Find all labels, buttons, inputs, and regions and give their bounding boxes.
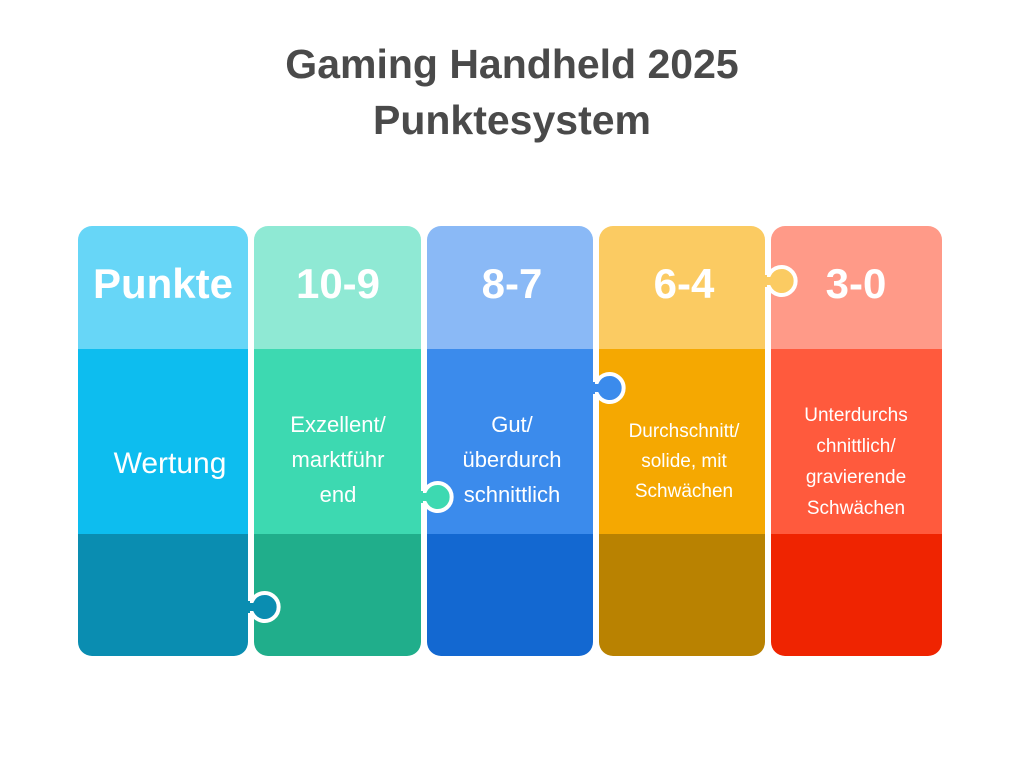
column: 8-7: schnittlich	[464, 482, 560, 507]
title: Gaming Handheld 2025	[285, 41, 739, 87]
column: 3-0: 3-0	[826, 260, 886, 307]
column: 3-0: gravierende	[806, 467, 906, 488]
column: Punkte	[78, 226, 248, 656]
column: 6-4: Schwächen	[635, 481, 733, 502]
column: 3-0: chnittlich/	[816, 436, 896, 457]
column: 6-4: solide, mit	[641, 451, 727, 472]
column: Punkte: Wertung	[114, 447, 226, 480]
column: 3-0: Unterdurchs	[804, 405, 908, 426]
title	[285, 41, 739, 143]
column: 10-9: end	[320, 482, 356, 507]
column: 8-7: Gut/	[491, 412, 534, 437]
puzzle tabs	[244, 267, 796, 621]
column: 6-4: 6-4	[654, 260, 715, 307]
column: 8-7: überdurch	[462, 447, 562, 472]
column: 6-4	[599, 226, 765, 656]
column: Punkte: Punkte	[93, 260, 233, 307]
column: 6-4: Durchschnitt/	[629, 421, 740, 442]
column: 8-7: 8-7	[482, 260, 542, 307]
column: 3-0: Schwächen	[807, 498, 905, 519]
column: 10-9	[254, 226, 421, 656]
column: 10-9: 10-9	[296, 260, 380, 307]
column: 8-7	[427, 226, 593, 656]
column: 3-0	[771, 226, 942, 656]
column: 10-9: marktführ	[292, 447, 384, 472]
column: 10-9: Exzellent/	[290, 412, 387, 437]
title: Punktesystem	[373, 97, 651, 143]
